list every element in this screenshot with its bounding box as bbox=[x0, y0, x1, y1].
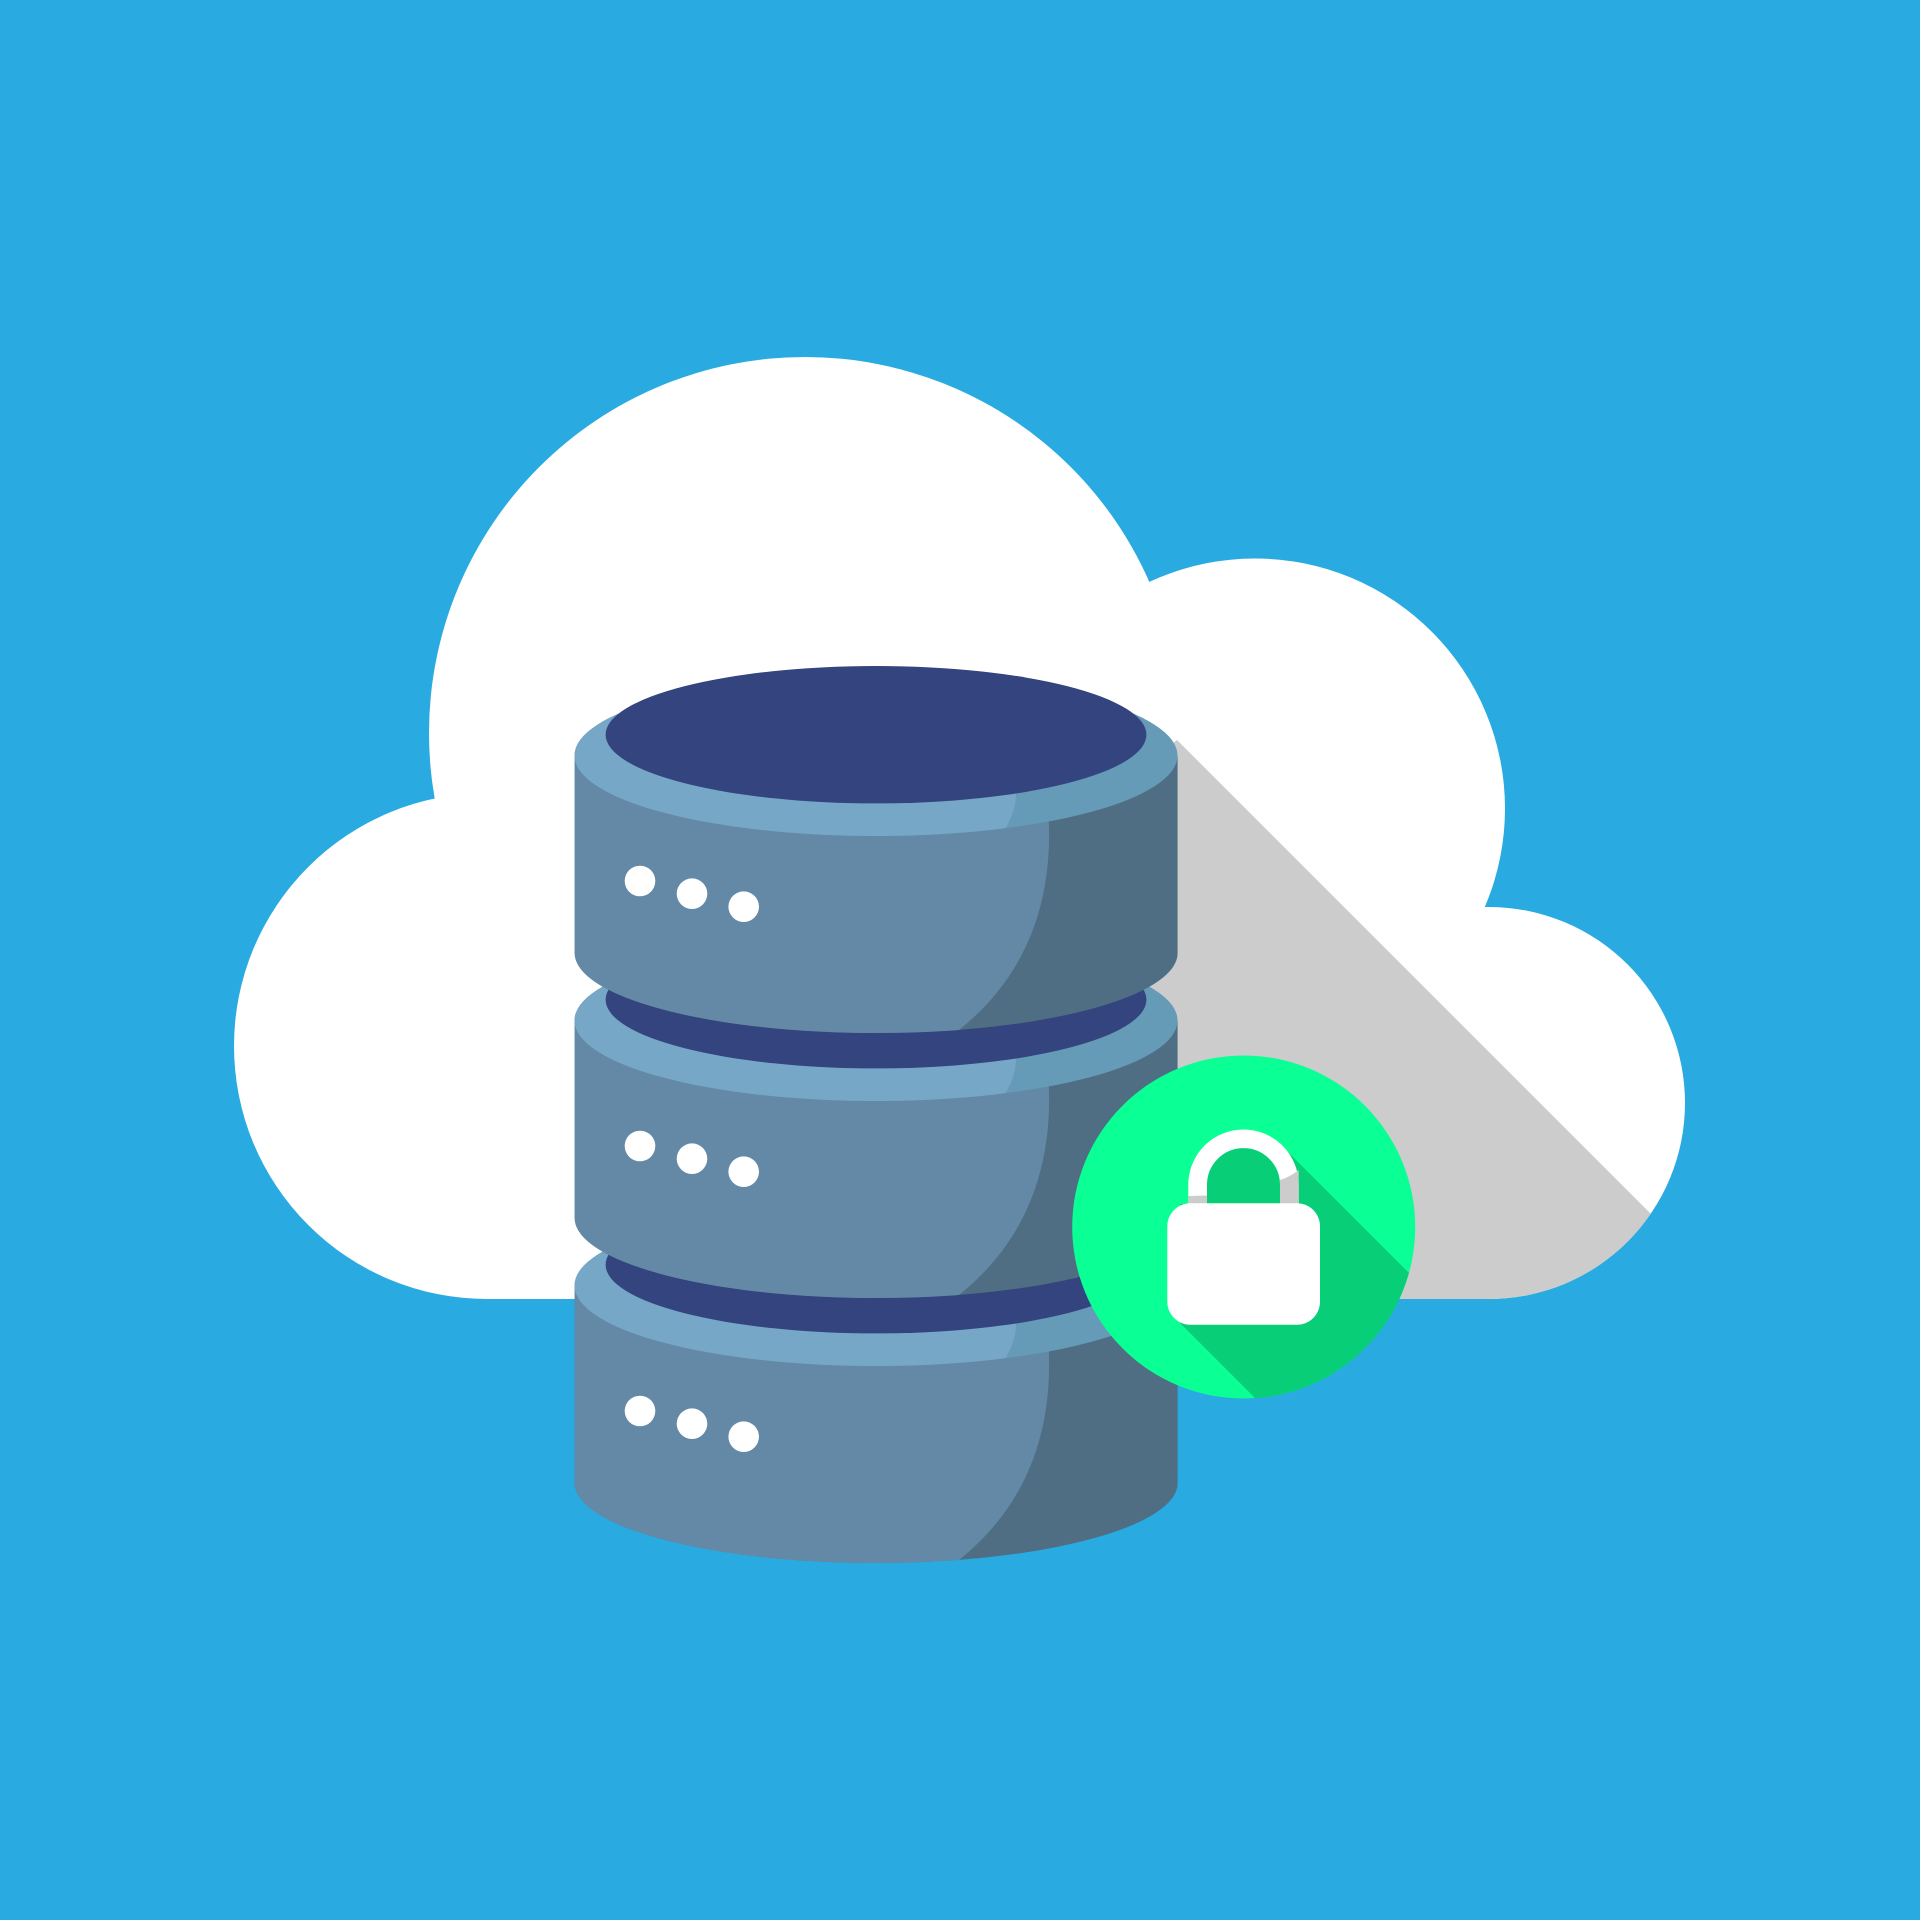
tier top disc bbox=[606, 1196, 1146, 1333]
tier body bbox=[575, 1286, 1178, 1563]
tier rim highlight bbox=[574, 1252, 1016, 1366]
security badge bbox=[1072, 1056, 1416, 1398]
database tier: top bbox=[574, 666, 1178, 1033]
cloud bbox=[234, 357, 1685, 1299]
status dots bbox=[625, 1131, 759, 1187]
tier top disc bbox=[606, 931, 1146, 1068]
shackle shadow right bbox=[1280, 1170, 1299, 1204]
tier body bbox=[575, 1020, 1178, 1298]
lock body bbox=[1167, 1203, 1320, 1325]
tier body highlight bbox=[575, 756, 1049, 1033]
tier body bbox=[575, 756, 1178, 1033]
database tier: bottom bbox=[574, 1252, 1178, 1563]
tier body highlight bbox=[575, 1020, 1049, 1298]
tier rim bbox=[574, 675, 1178, 836]
badge circle bbox=[1072, 1056, 1415, 1398]
status dots bbox=[625, 1396, 759, 1452]
illustration: secure cloud database bbox=[234, 357, 1685, 1563]
database tier: middle bbox=[574, 986, 1178, 1298]
lock long shadow bbox=[1180, 1148, 1409, 1398]
shackle shadow left bbox=[1188, 1196, 1207, 1204]
tier rim highlight bbox=[574, 986, 1016, 1101]
shackle bbox=[1198, 1139, 1289, 1206]
tier rim bbox=[574, 940, 1178, 1101]
tier top disc bbox=[606, 666, 1146, 803]
tier rim bbox=[574, 1205, 1178, 1366]
padlock bbox=[1167, 1139, 1320, 1325]
long shadow on cloud bbox=[1150, 740, 1651, 1299]
tier rim highlight bbox=[574, 713, 1016, 836]
status dots bbox=[625, 866, 759, 922]
tier body highlight bbox=[575, 1286, 1049, 1563]
